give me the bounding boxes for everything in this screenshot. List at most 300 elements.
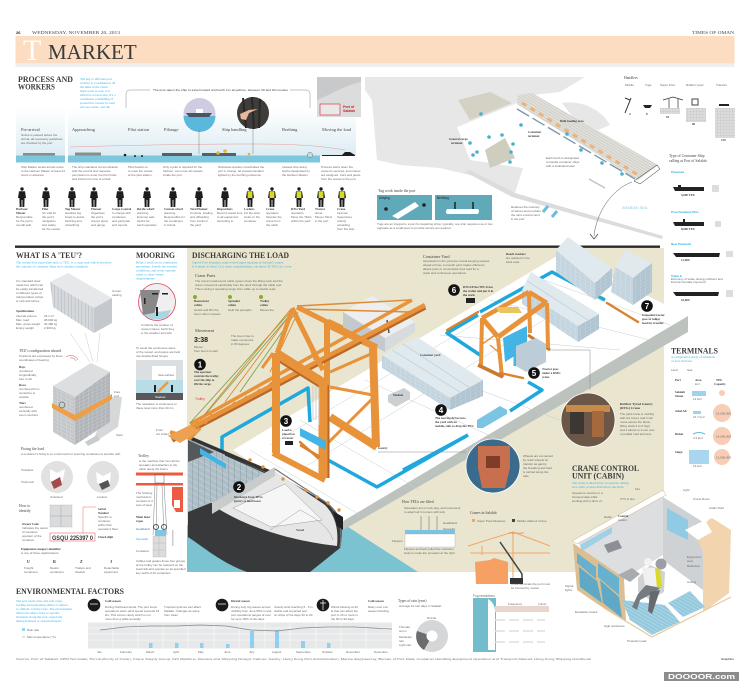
icons and text: weather notes: visibility from June 50% in and — [231, 609, 272, 613]
panel: crane parts: Movement — [195, 328, 215, 333]
panel: terminals: TERMINALS — [671, 346, 719, 356]
panel: tug work inside the port: Tugs are an integral to a port for departing ships; typically, one ship requires one or two — [377, 222, 493, 226]
timeline stage labels: Berthing — [282, 127, 298, 132]
workers row labels: operators — [291, 211, 304, 215]
workers row labels: Planner — [91, 207, 102, 211]
panel: terminals — [671, 346, 731, 468]
panel: fixing the load: A container's fixing is on a twist lock for securing containers to another with — [21, 452, 121, 456]
environmental intro text: loading and unloading ability is subject — [16, 603, 68, 607]
workers row labels: the port's — [91, 215, 104, 219]
container ship hull — [188, 437, 342, 572]
crane cabin illustration: High resistance — [604, 624, 625, 628]
panel: tug work inside the port: Untying — [379, 196, 390, 200]
crane rear frame — [327, 323, 378, 447]
discharge intro text: It is made of about 13 or more containerships, can move 30 TEUs in 1 hour — [192, 264, 292, 270]
heading: discharging the load: DISCHARGING THE LOAD — [192, 251, 289, 260]
workers row labels — [16, 207, 355, 231]
panel: trolley diagram: mechanism — [136, 495, 152, 499]
panel: terminals: 15,000,000 — [716, 412, 731, 416]
gantry note text: rails — [523, 474, 529, 478]
panel: mooring diagram: The relaxation is continuous to — [136, 402, 177, 406]
intro text: process: effective at each step. It's a — [80, 93, 116, 97]
panel: terminals: Jebel Ali — [675, 409, 687, 413]
panel: types of container ship: 12,000 — [681, 258, 690, 262]
credit: Graphics — [721, 657, 734, 661]
timeline ships — [23, 149, 355, 158]
step captions: under a RMG — [542, 371, 561, 375]
panel: trolley diagram: Spreader — [136, 537, 148, 541]
panel: how to identify: operator's fleet — [98, 527, 118, 531]
timeline captions: inside the port — [163, 173, 182, 177]
panel: how to identify: is one of three capital letters — [21, 551, 59, 555]
timeline stage labels: Approaching — [72, 127, 96, 132]
section rule — [15, 246, 660, 248]
panel: terminals: 12,000,000 — [716, 456, 731, 460]
icons and text: weather notes: season flooding — [368, 609, 389, 613]
cabin floor rim — [604, 597, 731, 637]
step markers 1-7: 1 — [198, 360, 203, 370]
timeline stage labels: Notice is passed before the — [21, 133, 58, 137]
crane cabin illustration: Ergonomic — [687, 555, 702, 559]
timeline stage labels: Pilot station — [128, 127, 150, 132]
workers row labels: and reports — [112, 223, 128, 227]
blue truck — [477, 406, 507, 428]
icons and text: weather notes: port operations ranges of over — [231, 613, 271, 617]
cabin top rim — [572, 490, 666, 544]
heading: crane control unit: Operators must be in a — [572, 491, 603, 495]
panel: TEU configuration aboard: numbered — [19, 405, 33, 409]
step markers 1-7: 2 — [237, 483, 242, 492]
panel: types of rain donut — [398, 599, 448, 652]
illustration: TEU container — [50, 273, 122, 362]
climate chart: September — [296, 650, 311, 654]
panel: mooring diagram: these level more than 40 cm — [136, 406, 174, 410]
step captions: the stack — [463, 293, 475, 297]
heading and panel: what is a TEU: be easily transferred — [16, 287, 44, 291]
heading: crane control unit — [572, 464, 639, 503]
heading: process and workers: WORKERS — [18, 82, 55, 92]
panel: how to identify: Owner Code — [22, 522, 39, 526]
workers row labels: planning — [137, 211, 149, 215]
intro text: process: productive vessels in, land — [80, 101, 115, 106]
timeline stage labels: Pilotage — [164, 127, 178, 132]
container stack: yard lower — [382, 337, 483, 410]
panel: mooring diagram: Sea-surface — [158, 373, 175, 377]
crane apex A-frame — [277, 307, 377, 370]
timeline stage labels — [21, 127, 352, 145]
intro text: process: and sea routes, and the — [80, 105, 110, 110]
panel: how TEUs are lifted — [392, 500, 461, 555]
heading and panel: mooring: MOORING — [136, 251, 175, 260]
heading and panel: mooring: Helps a berth are in continuous — [136, 260, 178, 264]
port map: the calm environment — [511, 213, 540, 217]
panel: crane parts: over the ship to — [194, 378, 215, 382]
panel: RTG crane text: (RTG) Crane — [620, 406, 640, 410]
panel: cranes in Salalah — [468, 511, 550, 590]
port map: terminal — [528, 134, 539, 138]
panel: container yard note: Operations in the yard are crucial keeping vessels — [423, 259, 490, 263]
climate chart: March — [146, 650, 155, 654]
step markers 1-7: 7 — [645, 302, 650, 311]
workers row labels: Lashers — [244, 207, 255, 211]
climate chart: August — [272, 650, 282, 654]
panel: crane parts: controls the trolley — [194, 374, 219, 378]
top date line — [16, 30, 734, 36]
workers row labels: Record vessel time — [217, 211, 243, 215]
panel: types of rain donut: Average 10 rain days in Salalah — [399, 604, 442, 608]
RTG leader line — [550, 350, 590, 390]
RTG stacked boxes — [516, 338, 546, 372]
panel: types of container ship: Environmentally improved — [671, 280, 706, 284]
step captions: The moving drives into — [435, 416, 466, 420]
heading: crane control unit: The crane is directed by an operator sitting — [572, 481, 629, 485]
heading: crane control unit: UNIT (CABIN) — [572, 472, 624, 480]
panel: how to identify: Freight — [24, 566, 34, 570]
workers row labels: container — [244, 219, 256, 223]
panel: how to identify: GSQU 225397 0 — [52, 536, 94, 542]
timeline captions: Only a pilot is required for the — [163, 165, 203, 169]
crane cabin illustration: Cabin Roof — [709, 506, 724, 510]
panel: mooring diagram — [136, 346, 183, 410]
workers row labels: Supervises — [337, 215, 352, 219]
illustration: container stack on ship: Fore — [114, 390, 120, 394]
icons and text: weather notes: operations when wind speed exceeds 15 — [105, 609, 160, 613]
panel: handlers: Tractors — [716, 83, 727, 87]
workers row labels: Fix the twist — [244, 211, 260, 215]
step captions: are stacked in the — [506, 256, 530, 260]
crane cabin illustration: Reflective — [687, 564, 701, 568]
panel: trolley diagram — [136, 454, 186, 575]
port map: in the port — [511, 217, 525, 221]
panel: handlers: 60 — [692, 122, 696, 126]
crane cabin illustration: Radio — [604, 515, 612, 519]
ship hold — [188, 437, 267, 512]
intro text: process: movement of the ship — [80, 109, 109, 113]
panel: types of rain donut: storm — [399, 629, 407, 633]
panel: trolley diagram: sets of steel — [136, 503, 152, 507]
icons and text: weather notes: on ships of the days 30 to 60 — [274, 613, 313, 617]
heading and panel: what is a TEU — [16, 251, 112, 330]
panel: types of container ship: Type of Container Ship — [669, 154, 705, 158]
crane cabin illustration: Escalation board — [575, 610, 598, 614]
workers row labels: the yard — [190, 223, 201, 227]
workers row labels: Crane — [337, 207, 346, 211]
illustration: TEU container: casting — [112, 293, 122, 297]
panel: crane parts: Trolley — [260, 299, 270, 303]
heading and panel: what is a TEU: 2,300 kg — [44, 326, 56, 330]
panel: terminals: 14,000,000 — [716, 434, 731, 438]
panel: terminals: Capacity — [714, 382, 726, 386]
panel: handlers: Rubber tyred — [686, 83, 704, 87]
cabin rear window — [667, 508, 688, 540]
panel: how to identify: How to — [19, 504, 30, 508]
timeline captions: The ship maintains communication — [72, 165, 119, 169]
step captions: Discharge from TEUs — [234, 495, 264, 499]
illustration: mooring circle: It reflects the position of — [141, 323, 173, 327]
icons and text: weather notes: for up to 30% of the days — [231, 617, 265, 621]
illustration: container stack on ship — [52, 355, 124, 446]
panel: terminals: Port — [675, 378, 682, 382]
container stack: yard upper — [556, 237, 612, 300]
panel: crane parts — [156, 273, 283, 436]
timeline stage labels: are checked by the port — [21, 141, 53, 145]
panel: how to identify: identify — [19, 509, 31, 513]
map labels: General cargo — [449, 137, 468, 141]
timeline stage labels: arrival, all necessary guidelines — [21, 137, 63, 141]
panel: TEU configuration aboard: centerline to — [19, 391, 36, 395]
watermark — [664, 672, 739, 681]
icons and text: weather notes: Salalah. Changes as wave — [164, 609, 200, 613]
panel: how to identify: Number — [98, 511, 110, 515]
panel: types of rain donut: Light rain — [399, 643, 412, 647]
crane boom — [170, 300, 425, 438]
step captions: back area — [506, 260, 520, 264]
panel: terminals: TEU — [716, 378, 723, 382]
climate chart: June — [224, 650, 231, 654]
heading and panel: what is a TEU: or rail) and lorries — [16, 299, 40, 303]
crane cabin illustration: Ceiling — [687, 580, 697, 584]
heading and panel: what is a TEU: It is standard steel — [16, 279, 41, 283]
panel: trolley diagram: spreader and attaches to the — [139, 463, 178, 467]
workers row labels: Dispatchers — [217, 207, 233, 211]
panel: mooring diagram: Seabed — [155, 395, 166, 399]
port map — [365, 77, 663, 239]
workers row labels: and offloading — [190, 215, 209, 219]
workers row labels: unloading — [337, 223, 350, 227]
panel: how TEUs are lifted: Headblock — [443, 521, 458, 525]
port map: ARABIAN SEA — [622, 206, 648, 210]
illustration: mooring circle — [138, 284, 176, 335]
heading and panel: what is a TEU: Max. gross weight — [16, 322, 40, 326]
workers row labels: Ensures safe — [137, 215, 155, 219]
panel: tug work inside the port: Tug work inside the port — [378, 189, 416, 193]
panel: cranes in Salalah: Cranes in Salalah — [470, 511, 497, 515]
timeline captions: harbour, can move all vessels — [163, 169, 203, 173]
discharge intro text — [192, 260, 292, 270]
panel: terminals: 14 km² — [693, 464, 702, 468]
panel: container yard note: Container Yard — [423, 254, 450, 259]
workers row labels: overall safe — [16, 223, 32, 227]
port map: Reduces the intensity — [511, 205, 540, 209]
container stack: yard right — [611, 250, 652, 305]
panel: handlers: 4 — [629, 112, 631, 116]
leader line to gantry photo — [378, 451, 466, 453]
panel: trolley diagram: ropes — [136, 519, 144, 523]
ship deck — [214, 471, 337, 546]
yard lane lines — [250, 275, 670, 515]
heading: crane control unit: working with a drive of — [572, 499, 602, 503]
heading and panel: what is a TEU: Specifications — [16, 309, 35, 313]
photo: RTG crane — [561, 393, 615, 447]
panel: how TEUs are lifted: body to make the spreader at the right — [404, 551, 455, 555]
panel: handlers: 8 — [646, 112, 648, 116]
environmental intro text: The port needs days and safe cargo — [16, 599, 63, 603]
panel: terminals: Land — [671, 368, 678, 372]
panel: terminals: 4.3 km² — [693, 436, 703, 440]
panel: types of rain donut: rain — [399, 639, 404, 643]
icons and text: weather notes: Cold season — [105, 599, 121, 603]
panel: how to identify — [19, 504, 120, 574]
heading and panel: mooring: trains or other vessel — [136, 272, 163, 276]
step captions: placed on — [282, 432, 295, 436]
heading and panel: mooring: conditions, and water currents — [136, 268, 176, 274]
panel: terminals: Singa — [675, 450, 683, 454]
panel: container yard note: allows ports to concentrate their load for a — [423, 267, 479, 271]
workers row labels: and safety — [42, 223, 56, 227]
icons and text: weather notes: kts. This occurs rarely which is not — [105, 613, 151, 617]
panel: trolley diagram: consists of 4 — [136, 499, 153, 503]
heading: process and workers — [18, 75, 73, 92]
panel: crane parts: cut trolley — [156, 432, 169, 436]
crane boom shadow — [172, 307, 425, 440]
heading: crane control unit: CRANE CONTROL — [572, 464, 639, 473]
panel: crane parts: from boom to wall — [194, 349, 218, 353]
step captions: Load is — [282, 428, 293, 432]
workers row labels: Yard Planner — [190, 207, 208, 211]
climate chart — [88, 622, 392, 654]
crane cabin illustration — [565, 487, 731, 643]
panel: mooring diagram: To avoid the continuous wave — [136, 346, 176, 350]
step captions: a tractor — [282, 436, 294, 440]
panel: RTG crane text: lifting stack 4 to 6 high — [620, 424, 650, 428]
environmental intro text: affects the ship's entry to specific — [16, 611, 60, 615]
panel: how to identify: Equipment category identifier — [21, 547, 61, 551]
panel: how to identify: containers — [24, 570, 38, 574]
port map: Bulk loading area — [560, 119, 584, 123]
panel: how to identify: Reefer — [50, 566, 59, 570]
container stack: yard middle — [522, 272, 599, 342]
panel: how to identify: Indicates the owner — [22, 526, 48, 530]
panel: crane parts: Trolley — [195, 397, 205, 401]
panel: crane parts: 3:38 — [194, 337, 208, 344]
inset locator map — [317, 77, 361, 117]
panel: TEU configuration aboard: numbered — [19, 369, 33, 373]
panel: TEU configuration aboard: outside — [19, 395, 29, 399]
step markers 1-7: 5 — [532, 369, 537, 378]
panel: TEU configuration aboard: Tiers — [19, 401, 27, 405]
climate chart: October — [322, 650, 333, 654]
cabin front glazing — [577, 553, 596, 579]
panel: tug work inside the port: Berthing — [437, 196, 449, 200]
panel: container yard note: stack and continuous operations — [423, 271, 467, 275]
panel: types of container ship: Post Panamax Plus — [671, 210, 699, 214]
masthead band with MARKET title: T — [23, 34, 41, 67]
workers row labels: in transit — [164, 223, 176, 227]
timeline captions: vessel is secured, and cranes — [321, 169, 361, 173]
timeline captions: hours in advance — [21, 173, 44, 177]
source line: Source: Port of Salalah; APM Terminals; Port Authority of Oman; Crane Supply Group; IHS Maritime; Reuters and Shipping Design; Kalmar; Gantry; Hong Kong Port Administration; Marine Engineering; Bureau of Port Data; Container Handling Equipment Operation and Transport Manual; Hong Kong Shipping Handbook — [16, 657, 592, 661]
panel: how TEUs are lifted: How TEUs are lifted — [402, 500, 434, 504]
cabin side wall — [663, 497, 703, 590]
panel: handlers: Super Post — [660, 83, 675, 87]
panel: fixing the load: Twist lock — [21, 480, 35, 484]
step captions: Unloaded tractor — [642, 313, 665, 317]
workers row labels: to all equipment — [217, 215, 238, 219]
timeline captions: and informs its time of arrival — [72, 177, 111, 181]
timeline captions: Process starts when the — [321, 165, 353, 169]
panel: trolley diagram: is the machine that runs all the — [139, 459, 180, 463]
panel: trolley diagram: Headblock — [136, 527, 151, 531]
panel: types of rain donut: Drizzle — [427, 616, 436, 620]
top date line: TIMES OF OMAN — [692, 31, 734, 35]
workers row labels: Responsible — [16, 215, 33, 219]
panel: terminals: Salalah — [675, 390, 685, 394]
panel: crane parts: The operator — [194, 370, 212, 374]
heading and panel: what is a TEU: The twenty-foot equivalent unit, or TEU, is a cargo unit which describes — [16, 260, 112, 266]
cabin console — [604, 540, 622, 553]
heading: environmental factors: ENVIRONMENTAL FACTORS — [16, 587, 125, 596]
panel: crane parts: Boom hoist — [194, 299, 210, 303]
timeline captions: permission to enter the Port limits — [72, 173, 117, 177]
crane cabin illustration: seat — [687, 559, 693, 563]
panel: terminals: Area — [695, 378, 702, 382]
watermark: DOOOOR.com — [668, 672, 735, 681]
panel: handlers: Mobile — [625, 83, 634, 87]
workers row labels: and gangs — [91, 223, 106, 227]
icons and text: weather notes: visible and impacted port — [274, 609, 307, 613]
panel: how to identify: Serial — [98, 507, 106, 511]
workers row labels: Controls, loading — [190, 211, 213, 215]
timeline captions: Workboat operator coordinates the — [218, 165, 264, 169]
workers row labels: crane from — [266, 219, 281, 223]
icons and text: weather notes — [88, 599, 389, 621]
map land — [365, 77, 585, 193]
panel: RTG crane text — [620, 402, 655, 436]
timeline captions: berths designated by — [282, 169, 310, 173]
climate chart: November — [346, 650, 360, 654]
timeline stage labels: Moving the load — [322, 127, 352, 132]
workers row labels: in the port — [315, 219, 329, 223]
panel: trolley diagram: key width of 20 containers — [136, 571, 171, 575]
panel: terminals: 21.7 km² — [693, 415, 705, 419]
map berth pier — [517, 93, 658, 180]
workers row labels: navigation — [42, 219, 56, 223]
workers row labels: each operation — [137, 223, 157, 227]
panel: handlers — [624, 76, 735, 142]
workers row labels: In charge with — [112, 211, 131, 215]
heading: process and workers: PROCESS AND — [18, 75, 73, 84]
timeline captions: to the Harbour Master at least 24 — [21, 169, 65, 173]
cabin floor — [573, 492, 731, 637]
panel: how TEUs are lifted: Flippers — [392, 539, 403, 543]
panel: types of container ship: calling at Port of Salalah — [669, 159, 707, 163]
intro text: process: continuous reshuffling of — [80, 97, 114, 101]
orange trailers — [300, 303, 638, 458]
inset locator map: Port of — [343, 105, 355, 109]
water — [187, 525, 418, 572]
panel: handlers: Tugs — [645, 83, 652, 87]
panel: mooring diagram: use double-fitted hinges — [136, 354, 168, 358]
panel: crane parts: Spreader — [228, 299, 241, 303]
crane cabin illustration: lights — [565, 588, 573, 592]
panel: crane parts: cables — [228, 303, 237, 307]
workers row labels: Custom wharf — [164, 207, 184, 211]
panel: TEU configuration aboard: longitudinally — [19, 373, 37, 377]
workers row labels: Responsible for — [164, 215, 185, 219]
panel: types of container ship: 8,000 TEU — [681, 227, 696, 231]
workers row labels: Pilot — [42, 207, 49, 211]
panel: crane parts: Hoists and lifts the — [194, 308, 219, 312]
workers row labels: Organises — [91, 211, 105, 215]
panel: trolley diagram: The hoisting — [136, 491, 153, 495]
panel: how to identify: R — [53, 559, 56, 564]
panel: fixing the load: Twistlock — [21, 468, 34, 472]
panel: trolley diagram: Cables and guides those four groups — [136, 559, 186, 563]
panel: fixing the load: Locked — [97, 495, 107, 499]
heading and panel: what is a TEU: Internal volume — [16, 314, 37, 318]
step markers 1-7: 4 — [439, 406, 444, 415]
workers row labels: Operate the — [266, 215, 282, 219]
